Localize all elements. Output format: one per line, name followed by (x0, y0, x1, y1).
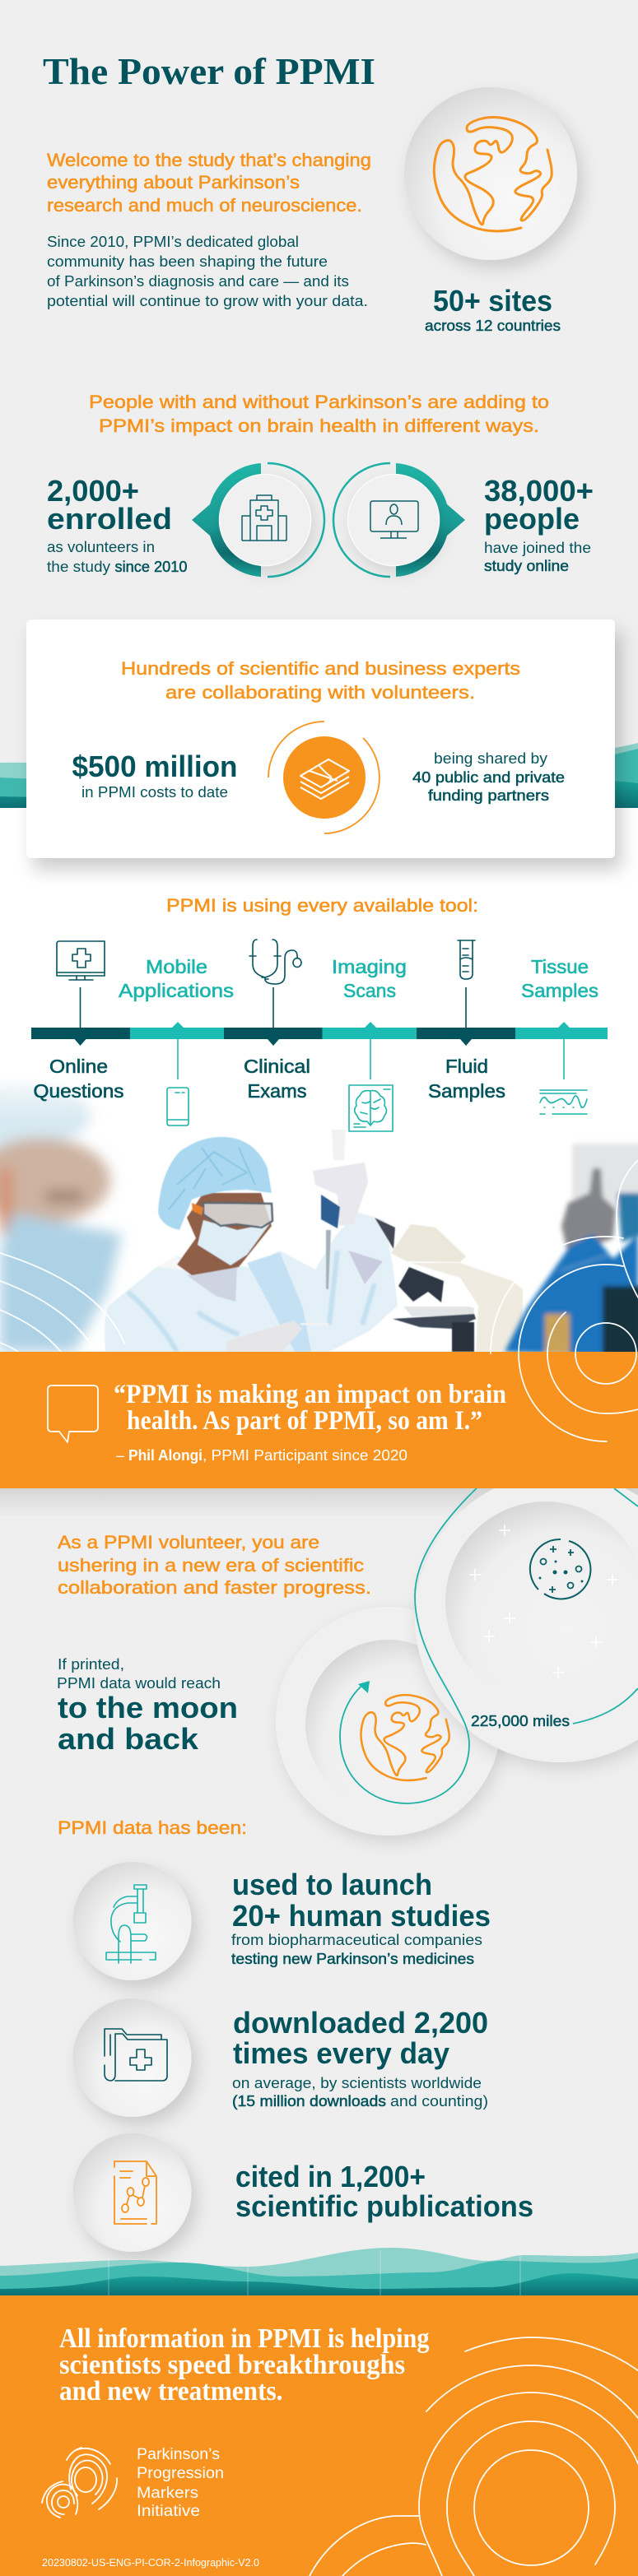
partners text: funding partners (428, 787, 549, 804)
quote text (114, 1380, 506, 1436)
intro body text: Since 2010, PPMI’s dedicated global (47, 234, 299, 250)
intro heading: research and much of neuroscience. (47, 195, 362, 216)
lower outer disc (275, 1718, 505, 1846)
people heading (89, 392, 549, 436)
stat: downloads (232, 2006, 488, 2110)
icon: test tube (458, 940, 475, 979)
goggles (203, 1203, 272, 1228)
blurred foreground person (0, 1082, 122, 1352)
timeline icons and labels (31, 940, 608, 1131)
intro body text: of Parkinson’s diagnosis and care — and its (47, 273, 349, 290)
quote attribution: Phil Alongi (128, 1447, 203, 1464)
stat: human studies: from biopharmaceutical companies (231, 1932, 482, 1948)
stat: human studies: 20+ human studies (232, 1899, 491, 1933)
figure-eight illustration (276, 1473, 638, 1836)
stat: downloads: (15 million downloads (232, 2093, 386, 2110)
quote attribution: – (116, 1447, 124, 1464)
teal loop line (340, 1484, 638, 1803)
stat: downloads: and counting) (390, 2093, 488, 2110)
stat: publications: cited in 1,200+ (235, 2160, 426, 2193)
panel: footer (0, 2295, 638, 2576)
decorative rings across photo and band (491, 1160, 638, 1441)
label: Imaging Scans: Imaging (332, 956, 407, 977)
moon and back text: If printed, (58, 1656, 124, 1673)
intro body text: potential will continue to grow with your data. (47, 293, 368, 309)
intro body text (47, 234, 368, 309)
volunteer heading (58, 1532, 371, 1598)
enrolled stat: as volunteers in (47, 539, 155, 555)
stat: human studies: testing new Parkinson’s medicines (231, 1951, 474, 1967)
label: Clinical Exams: Exams (247, 1080, 306, 1102)
collaboration heading (121, 658, 520, 703)
collaboration heading: Hundreds of scientific and business experts (121, 658, 520, 679)
title: The Power of PPMI (43, 50, 375, 92)
logo wordmark: Parkinson’s (137, 2446, 220, 2463)
neck and face (177, 1193, 272, 1275)
quote text: “PPMI is making an impact on brain (114, 1380, 506, 1409)
icon: speech bubble (48, 1385, 98, 1442)
icon: stethoscope (249, 940, 297, 984)
plate: folder (72, 1998, 191, 2117)
stat: human studies: used to launch (232, 1868, 432, 1901)
enrolled stat: 2,000+ (47, 474, 139, 508)
pipette and gloved hand (332, 1130, 346, 1160)
label: Clinical Exams (244, 1056, 310, 1102)
people heading: People with and without Parkinson’s are adding to (89, 392, 549, 412)
logo wordmark (137, 2446, 224, 2520)
quote text: health. As part of PPMI, so am I.” (127, 1406, 482, 1436)
icon: monitor with cross (57, 941, 105, 980)
label: Mobile Applications (119, 956, 234, 1001)
moon and back text (57, 1656, 238, 1756)
panel: collaboration card (26, 620, 615, 858)
shadow below band (0, 1488, 638, 1516)
online participants stat (484, 474, 594, 574)
tools heading: PPMI is using every available tool: (166, 895, 478, 916)
moon and back text: PPMI data would reach (57, 1675, 221, 1692)
label: Tissue Samples (521, 956, 598, 1001)
quote attribution (116, 1447, 407, 1464)
bottom waves (0, 2248, 638, 2295)
upper outer disc (415, 1473, 638, 1762)
closing message (59, 2323, 430, 2407)
icon: chart nodes (122, 2178, 149, 2212)
label: Fluid Samples: Fluid (445, 1056, 488, 1077)
intro body text: community has been shaping the future (47, 253, 328, 270)
icon: brain scan (349, 1085, 393, 1131)
label: Mobile Applications: Mobile (146, 956, 207, 977)
icon: moon (530, 1539, 590, 1599)
partners text: 40 public and private (412, 769, 565, 786)
stat: downloads: on average, by scientists worldwide (232, 2075, 482, 2091)
label: Online Questions (33, 1056, 123, 1102)
people heading: PPMI’s impact on brain health in different ways. (99, 415, 539, 436)
sites stat: 50+ sites (433, 284, 552, 318)
icon: document chart (114, 2161, 156, 2224)
photo: scientist in lab (0, 1061, 638, 1358)
logo wordmark: Progression (137, 2465, 224, 2482)
volunteer heading: As a PPMI volunteer, you are (58, 1532, 319, 1553)
volunteer heading: ushering in a new era of scientific (58, 1555, 364, 1576)
intro heading: everything about Parkinson’s (47, 172, 300, 193)
enrolled stat (47, 474, 188, 575)
icon: microscope (106, 1885, 156, 1963)
document code: 20230802-US-ENG-PI-COR-2-Infographic-V2.0 (42, 2556, 259, 2569)
label: Fluid Samples (428, 1056, 505, 1102)
blurred right foreground hand (505, 1144, 638, 1358)
icon: PPMI logo (42, 2448, 117, 2518)
label: Imaging Scans (332, 956, 407, 1001)
partners text: being shared by (434, 750, 547, 767)
moon and back text: to the moon (58, 1691, 238, 1724)
enrolled stat: the study (47, 559, 110, 575)
data heading: PPMI data has been: (58, 1817, 247, 1838)
icon: globe (434, 117, 552, 231)
online participants stat: 38,000+ (484, 474, 594, 508)
globe plate (404, 87, 577, 260)
stat: downloads: downloaded 2,200 (233, 2006, 488, 2040)
plate: microscope (72, 1862, 191, 1980)
intro heading: Welcome to the study that’s changing (47, 150, 371, 170)
icon: online monitor badge (333, 463, 465, 577)
label: Tissue Samples: Samples (521, 980, 598, 1001)
online participants stat: have joined the (484, 540, 591, 556)
collaboration heading: are collaborating with volunteers. (165, 682, 475, 703)
icon: small globe (361, 1695, 449, 1780)
sites stat: across 12 countries (425, 318, 561, 334)
surgical mask (198, 1220, 270, 1265)
icon: tissue layers (540, 1090, 587, 1114)
fade into white (0, 1078, 82, 1111)
logo wordmark: Initiative (137, 2503, 200, 2520)
stat: human studies (231, 1868, 491, 1967)
enrolled stat: since 2010 (115, 559, 188, 575)
closing message: scientists speed breakthroughs (59, 2350, 405, 2380)
plate: document (72, 2133, 191, 2252)
microscope (375, 1218, 395, 1249)
logo wordmark: Markers (137, 2485, 198, 2502)
hair cap (158, 1137, 272, 1230)
online participants stat: study online (484, 558, 569, 574)
stat: publications (235, 2160, 533, 2223)
lower glove (226, 1320, 302, 1352)
stat: downloads: times every day (233, 2036, 449, 2070)
label: Mobile Applications: Applications (119, 980, 234, 1001)
partners text (412, 750, 565, 804)
label: Online Questions: Online (49, 1056, 108, 1077)
star sparkles (469, 1525, 618, 1678)
cost stat (72, 750, 237, 801)
cost stat: $500 million (72, 750, 237, 783)
online participants stat: people (484, 502, 580, 536)
label: Fluid Samples: Samples (428, 1080, 505, 1102)
icon: money circle (268, 722, 380, 833)
arrowhead (358, 1681, 370, 1693)
lower inner plate (305, 1640, 420, 1764)
label: Tissue Samples: Tissue (531, 956, 589, 977)
upper inner plate (445, 1502, 619, 1650)
icon: phone (167, 1088, 189, 1126)
top waves (0, 743, 638, 808)
quote attribution: , PPMI Participant since 2020 (203, 1447, 407, 1464)
sites stat (425, 284, 561, 334)
panel: quote band (0, 1352, 638, 1488)
label: Online Questions: Questions (33, 1080, 123, 1102)
background white area below waves (0, 808, 638, 1359)
closing message: and new treatments. (59, 2376, 283, 2407)
icon: stethoscope bell (293, 958, 301, 968)
footer rings (310, 2337, 638, 2576)
icon: folder (105, 2029, 167, 2081)
timeline bar (31, 987, 608, 1079)
volunteer heading: collaboration and faster progress. (58, 1577, 371, 1598)
stat: publications: scientific publications (235, 2189, 533, 2223)
gown (105, 1130, 523, 1352)
intro heading (47, 150, 371, 216)
distance label: 225,000 miles (471, 1713, 570, 1729)
closing message: All information in PPMI is helping (59, 2323, 430, 2354)
cost stat: in PPMI costs to date (81, 784, 228, 801)
left photo arcs (0, 1253, 124, 1352)
label: Clinical Exams: Clinical (244, 1056, 310, 1077)
label: Imaging Scans: Scans (343, 980, 396, 1001)
icon: hospital badge (192, 463, 324, 577)
enrolled stat: enrolled (47, 502, 172, 536)
moon and back text: and back (58, 1722, 199, 1756)
